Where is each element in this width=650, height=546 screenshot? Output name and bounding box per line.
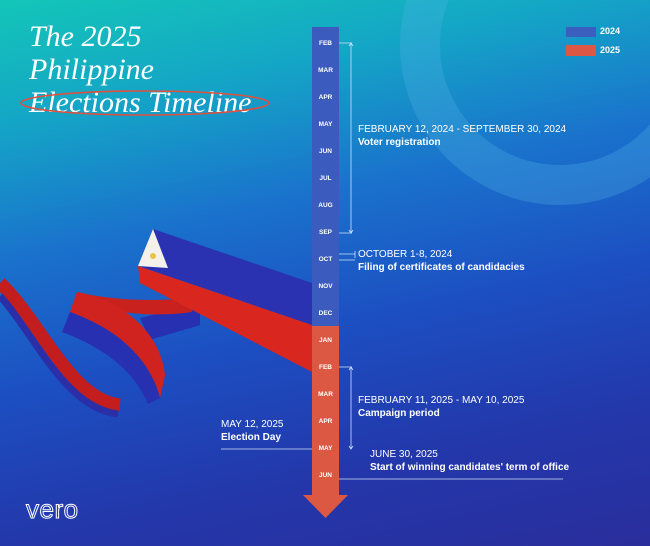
timeline bar: OCT	[319, 256, 332, 263]
event: term of office: Start of winning candidates' term of office	[370, 462, 569, 473]
event: campaign period	[358, 395, 524, 419]
timeline bar: MAR	[318, 391, 333, 398]
timeline bar: APR	[319, 418, 332, 425]
timeline bar: JAN	[319, 337, 332, 344]
event: filing of COC	[358, 249, 525, 273]
timeline bar: NOV	[318, 283, 333, 290]
title: Philippine	[29, 53, 154, 86]
timeline bar: JUN	[319, 472, 332, 479]
legend: 2025	[600, 45, 620, 55]
legend	[566, 26, 620, 56]
event: filing of COC: Filing of certificates of candidacies	[358, 262, 525, 273]
event: term of office: JUNE 30, 2025	[370, 449, 438, 460]
event: election day	[221, 419, 283, 443]
timeline bar: JUN	[319, 148, 332, 155]
event: election day: Election Day	[221, 432, 281, 443]
timeline bar: AUG	[318, 202, 333, 209]
timeline bar: JUL	[319, 175, 332, 182]
event: campaign period: FEBRUARY 11, 2025 - MAY 10, 2025	[358, 395, 524, 406]
event: filing of COC: OCTOBER 1-8, 2024	[358, 249, 452, 260]
event: voter registration	[358, 124, 566, 148]
legend: 2024	[600, 26, 620, 36]
timeline bar: FEB	[319, 364, 332, 371]
timeline bar: MAR	[318, 67, 333, 74]
event: campaign period: Campaign period	[358, 408, 440, 419]
timeline bar: MAY	[319, 121, 332, 128]
timeline bar: MAY	[319, 445, 332, 452]
timeline bar: SEP	[319, 229, 332, 236]
event: voter registration: FEBRUARY 12, 2024 - SEPTEMBER 30, 2024	[358, 124, 566, 135]
title: The 2025	[29, 20, 142, 53]
title ellipse	[20, 90, 270, 116]
title	[28, 20, 251, 119]
timeline bar: FEB	[319, 40, 332, 47]
event: term of office	[370, 449, 569, 473]
timeline bar: DEC	[319, 310, 332, 317]
timeline bar: APR	[319, 94, 332, 101]
event: election day: MAY 12, 2025	[221, 419, 283, 430]
event: voter registration: Voter registration	[358, 137, 441, 148]
timeline bar	[303, 27, 348, 518]
title: Elections Timeline	[29, 86, 251, 119]
